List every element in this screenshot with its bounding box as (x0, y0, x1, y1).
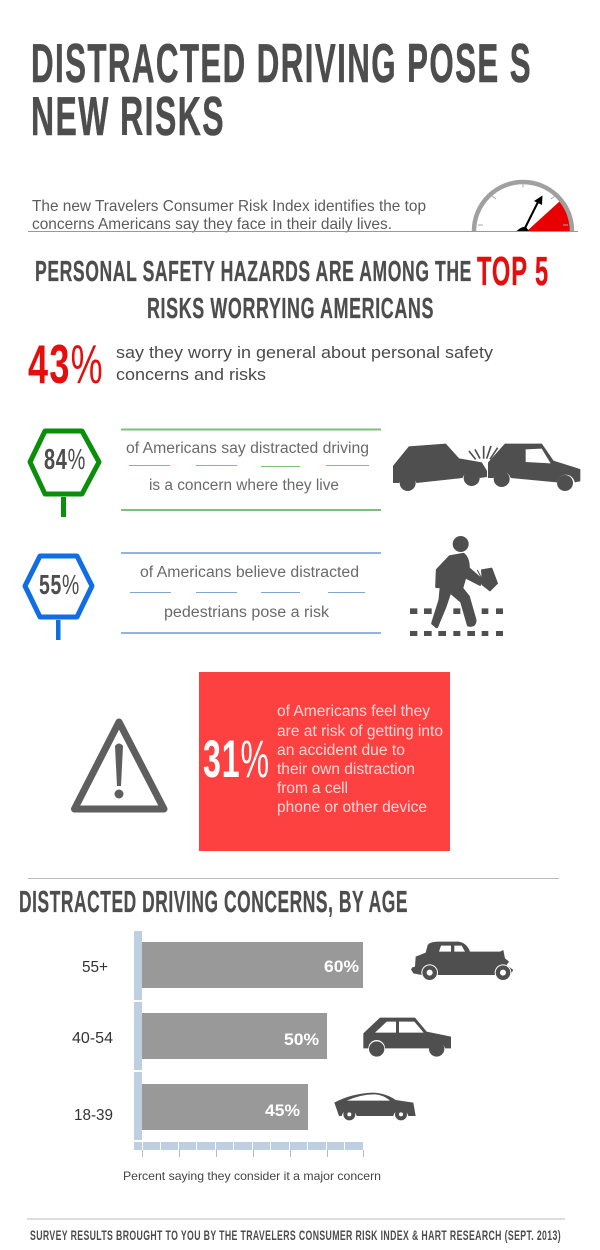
stat: 84 percent green sign: 84% (44, 444, 86, 476)
text block: distracted driving concern: of Americans say distracted driving (126, 440, 369, 457)
icon: sports car (334, 1093, 416, 1120)
stat: 43 percent: say they worry in general about personal safety (116, 343, 494, 362)
stat: 43 percent: 43% (28, 333, 104, 395)
intro text: The new Travelers Consumer Risk Index identifies the top (32, 198, 426, 215)
icon: vintage car (411, 942, 513, 981)
icon: warning triangle (74, 722, 164, 809)
bar chart: concerns by age (72, 931, 381, 1183)
icon: risk gauge (474, 182, 572, 231)
stat: 55 percent blue sign (25, 556, 92, 640)
icon: hatchback car (363, 1018, 451, 1057)
heading: personal safety hazards: TOP 5 (477, 248, 549, 294)
heading: personal safety hazards: RISKS WORRYING AMERICANS (147, 293, 434, 325)
text block: distracted pedestrians: pedestrians pose a risk (164, 604, 329, 621)
bar chart: concerns by age: 40-54 (72, 1030, 113, 1047)
stat: 43 percent: concerns and risks (116, 365, 266, 384)
bar chart: concerns by age: 45% (265, 1101, 300, 1120)
panel: 31 percent callout: an accident due to (277, 742, 405, 759)
panel: 31 percent callout: 31% (203, 730, 270, 789)
panel: 31 percent callout (199, 672, 450, 851)
bar chart: concerns by age: Percent saying they consider it a major concern (123, 1169, 381, 1183)
panel: 31 percent callout: of Americans feel they (277, 703, 430, 720)
intro text (32, 198, 426, 233)
text block: distracted pedestrians: of Americans believe distracted (140, 564, 359, 581)
bar chart: concerns by age: 18-39 (74, 1107, 113, 1124)
text block: distracted driving concern: is a concern where they live (149, 477, 339, 494)
text block: distracted driving concern (121, 430, 381, 510)
title (31, 32, 532, 147)
panel: 31 percent callout: are at risk of getting into (277, 723, 443, 740)
icon: car crash (393, 444, 580, 491)
intro text: concerns Americans say they face in their daily lives. (32, 216, 392, 233)
text block: distracted pedestrians (121, 553, 381, 633)
title: NEW RISKS (31, 85, 225, 147)
bar chart: concerns by age: 55+ (82, 959, 108, 976)
panel: 31 percent callout: their own distraction (277, 761, 415, 778)
stat: 55 percent blue sign: 55% (39, 569, 80, 600)
panel: 31 percent callout: phone or other device (277, 799, 427, 816)
stat: 43 percent (28, 333, 494, 395)
bar chart: concerns by age: 60% (324, 957, 359, 976)
stat: 84 percent green sign (30, 431, 99, 517)
icon: pedestrian on crosswalk (410, 536, 503, 636)
panel: 31 percent callout: from a cell (277, 780, 348, 797)
bar chart: concerns by age: 50% (284, 1030, 319, 1049)
heading: personal safety hazards (35, 248, 549, 325)
